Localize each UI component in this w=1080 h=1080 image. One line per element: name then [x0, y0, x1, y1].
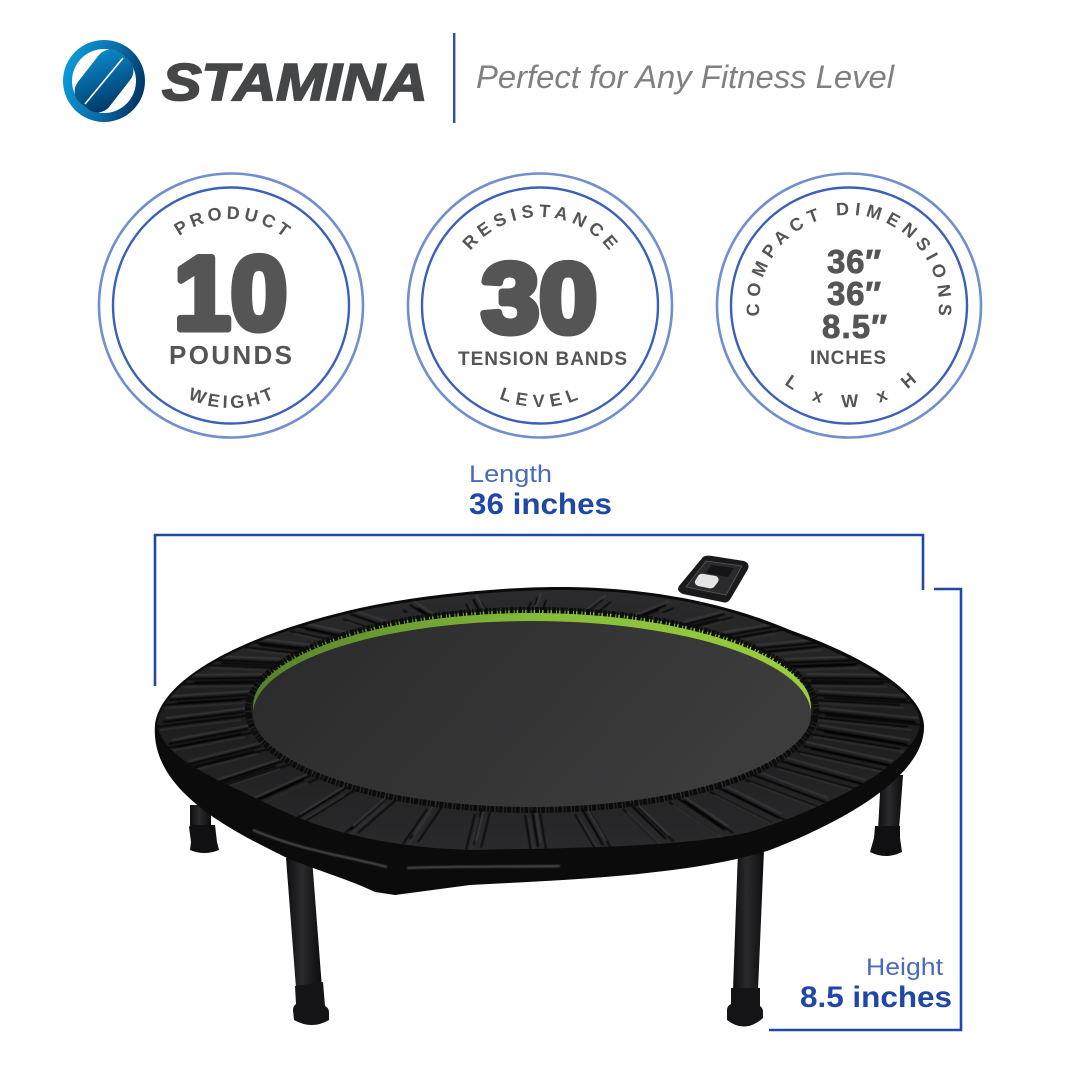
rim wrinkles	[156, 593, 923, 855]
tube highlight	[253, 830, 560, 868]
length dimension bracket	[155, 535, 923, 686]
jump mat	[253, 621, 811, 807]
badge: compact dimensions: L x W x H	[785, 372, 916, 408]
length label: 36 inches	[469, 488, 612, 521]
badge: resistance level: 30	[482, 245, 597, 353]
height label: 8.5 inches	[800, 981, 952, 1014]
badge: product weight: POUNDS	[169, 340, 292, 370]
rim tube	[155, 587, 924, 895]
badge: product weight: PRODUCT	[174, 206, 292, 236]
badge: compact dimensions: 36″	[827, 275, 881, 312]
green pad	[253, 610, 811, 804]
tagline: Perfect for Any Fitness Level	[476, 59, 895, 95]
front left leg	[286, 858, 329, 1025]
console	[678, 556, 748, 602]
height dimension bracket	[769, 589, 961, 1030]
badge: compact dimensions	[716, 172, 982, 439]
rim skirt	[157, 590, 920, 850]
trampoline	[155, 556, 924, 1027]
spring fringe	[248, 610, 816, 810]
badge: product weight: WEIGHT	[190, 387, 271, 408]
badge: compact dimensions: 8.5″	[822, 308, 887, 345]
height label: Height	[866, 954, 943, 981]
badge: compact dimensions: INCHES	[810, 348, 886, 369]
logo wordmark: STAMINA	[162, 53, 428, 111]
front right leg	[727, 850, 764, 1027]
badge: resistance level	[406, 172, 674, 439]
badge: compact dimensions: 36″	[827, 243, 881, 280]
badge: compact dimensions: COMPACT DIMENSIONS	[746, 202, 952, 316]
rear left leg	[189, 805, 219, 853]
header divider	[453, 33, 455, 123]
length label: Length	[469, 461, 552, 488]
badge: resistance level: TENSION BANDS	[458, 349, 627, 370]
badge: product weight: 10	[174, 235, 287, 351]
badge: product weight	[98, 172, 364, 439]
badge: resistance level: LEVEL	[500, 387, 578, 407]
badge: resistance level: RESISTANCE	[462, 204, 618, 250]
logo: Stamina emblem	[63, 40, 145, 122]
length label	[469, 461, 612, 521]
rear right leg	[870, 775, 903, 856]
height label	[800, 954, 952, 1014]
